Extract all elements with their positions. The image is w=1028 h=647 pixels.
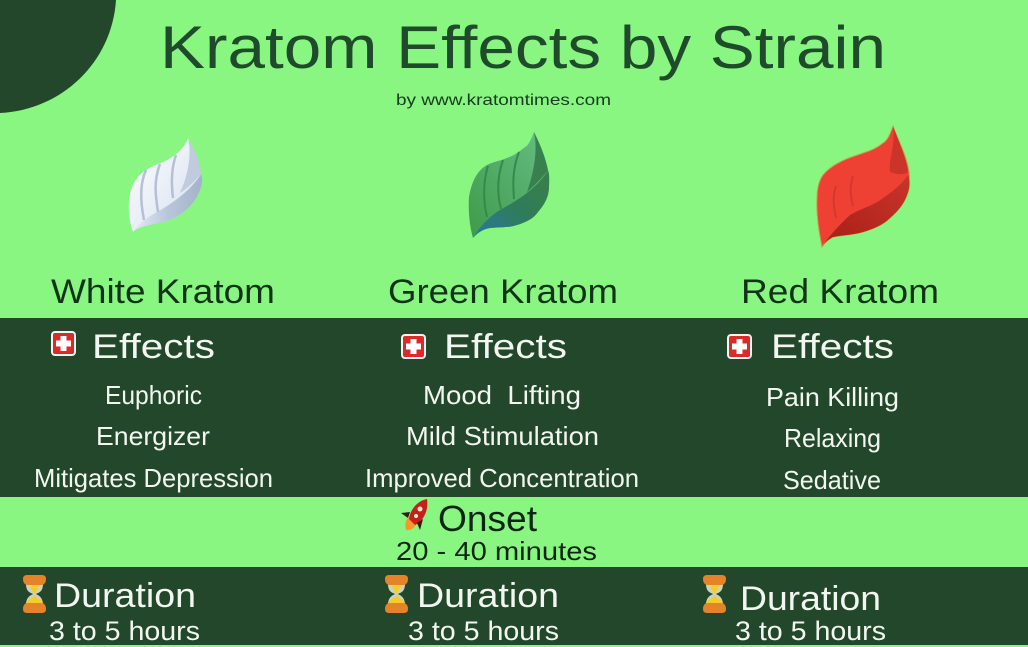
icon: medical cross: [727, 334, 752, 359]
strain heading: white: White Kratom: [51, 273, 275, 311]
strain heading: red: Red Kratom: [741, 273, 939, 311]
subtitle: by www.kratomtimes.com: [396, 92, 611, 109]
icon: white leaf: [129, 138, 202, 232]
effects heading: Effects: [771, 328, 894, 366]
effect: euphoric: Euphoric: [105, 380, 202, 410]
panel: duration band: [0, 567, 1028, 645]
icon: green leaf: [469, 132, 549, 238]
icon: hourglass: [703, 575, 726, 613]
icon: hourglass: [23, 575, 46, 613]
icon: medical cross: [51, 331, 76, 356]
duration time: 3 to 5 hours: [49, 616, 200, 646]
effects heading: Effects: [92, 328, 215, 366]
duration time: 3 to 5 hours: [408, 616, 559, 646]
panel: onset band: [0, 497, 1028, 567]
duration heading: Duration: [417, 577, 559, 615]
icon: rocket: [401, 499, 427, 530]
icon: hourglass: [385, 575, 408, 613]
title: Kratom Effects by Strain: [160, 14, 886, 81]
duration heading: Duration: [54, 577, 196, 615]
effect: mood lifting: Mood Lifting: [423, 380, 581, 410]
effect: sedative: Sedative: [783, 465, 881, 495]
panel: effects band: [0, 318, 1028, 497]
effect: relaxing: Relaxing: [784, 423, 881, 453]
effects heading: Effects: [444, 328, 567, 366]
duration column: red kratom: [703, 575, 886, 646]
onset time: 20 - 40 minutes: [396, 536, 597, 566]
effect: mitigates depression: Mitigates Depression: [34, 463, 273, 493]
effects column: green kratom: [365, 328, 639, 493]
duration time: 3 to 5 hours: [735, 616, 886, 646]
onset heading: Onset: [438, 498, 537, 539]
effect: pain killing: Pain Killing: [766, 382, 899, 412]
duration heading: Duration: [740, 580, 881, 618]
effects column: white kratom: [34, 328, 273, 493]
effect: energizer: Energizer: [96, 421, 210, 451]
strain heading: green: Green Kratom: [388, 273, 618, 311]
effect: mild stimulation: Mild Stimulation: [406, 421, 599, 451]
duration column: green kratom: [385, 575, 559, 646]
effect: improved concentration: Improved Concentration: [365, 463, 639, 493]
effects column: red kratom: [727, 328, 899, 495]
icon: medical cross: [401, 334, 426, 359]
duration column: white kratom: [23, 575, 200, 646]
icon: red leaf: [817, 126, 910, 247]
corner quarter circle: [0, 0, 116, 113]
